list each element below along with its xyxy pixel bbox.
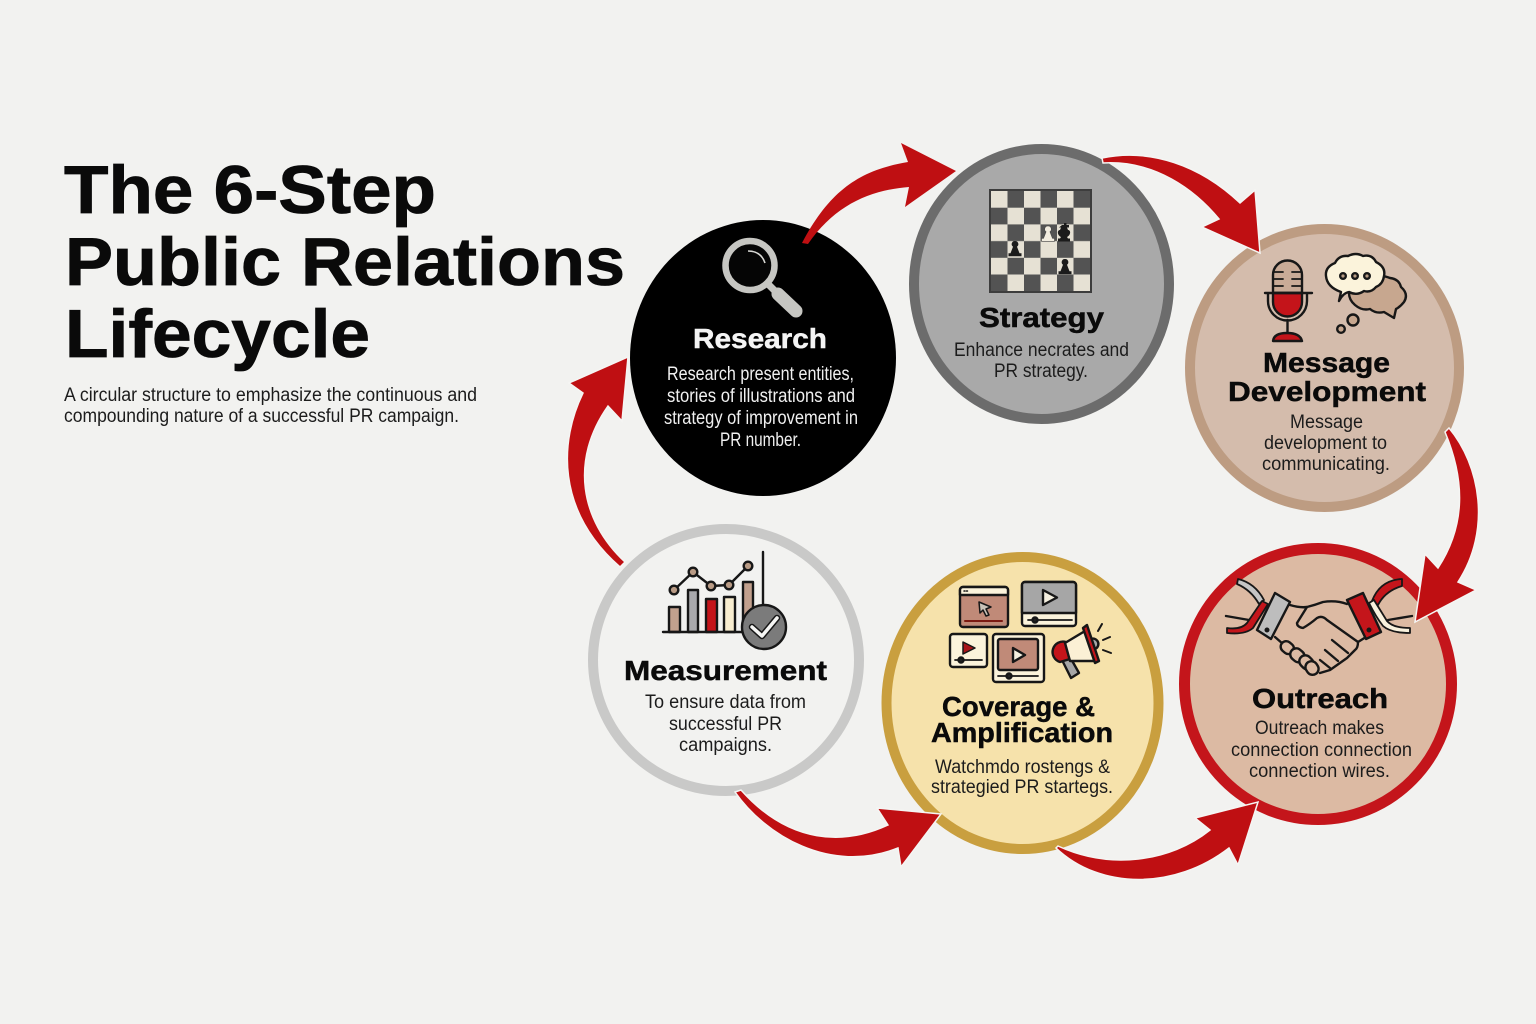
message body: Message xyxy=(1290,412,1363,433)
icon: magnifying glass xyxy=(726,241,796,311)
arrow: measurement to coverage xyxy=(735,790,941,867)
icon: handshake with wires xyxy=(1226,579,1412,677)
coverage heading xyxy=(931,691,1113,748)
measurement body xyxy=(645,692,806,756)
outreach body: Outreach makes xyxy=(1255,718,1384,739)
message body: development to xyxy=(1264,433,1387,454)
message body: communicating. xyxy=(1262,454,1390,475)
icon: speech bubbles xyxy=(1326,254,1406,333)
icon: media windows xyxy=(950,582,1076,682)
strategy circle xyxy=(914,149,1169,419)
research circle xyxy=(630,220,896,496)
coverage circle xyxy=(886,557,1158,849)
arrow: research to strategy xyxy=(802,143,956,244)
message heading: Development xyxy=(1228,376,1426,407)
message heading: Message xyxy=(1263,347,1390,378)
arrow: coverage to outreach xyxy=(1056,802,1258,880)
measurement heading: Measurement xyxy=(624,655,827,686)
title: Lifecycle xyxy=(65,296,370,372)
measurement body: successful PR xyxy=(669,714,782,735)
arrow: message development to outreach xyxy=(1415,428,1478,622)
subtitle: compounding nature of a successful PR campaign. xyxy=(64,406,459,427)
panel: coverage and amplification xyxy=(886,557,1158,849)
subtitle: A circular structure to emphasize the continuous and xyxy=(64,385,477,406)
icon: microphone xyxy=(1265,260,1312,341)
research body: PR number. xyxy=(720,430,801,451)
panel: outreach xyxy=(1184,548,1452,820)
strategy body: PR strategy. xyxy=(994,361,1088,382)
message body xyxy=(1262,412,1390,475)
panel: message development xyxy=(1190,229,1459,507)
outreach body: connection connection xyxy=(1231,740,1412,761)
outreach circle xyxy=(1184,548,1452,820)
strategy body xyxy=(954,340,1129,382)
icon: chess board xyxy=(990,190,1091,292)
message heading xyxy=(1228,347,1426,407)
measurement circle xyxy=(593,529,859,791)
research body: Research present entities, xyxy=(667,364,854,385)
coverage heading: Amplification xyxy=(931,717,1113,748)
arrow: measurement to research xyxy=(567,357,628,567)
research body xyxy=(664,364,858,451)
research body: stories of illustrations and xyxy=(667,386,855,407)
panel: measurement xyxy=(593,529,859,791)
outreach body xyxy=(1231,718,1412,782)
title: Public Relations xyxy=(65,224,625,300)
coverage body: Watchmdo rostengs & xyxy=(935,757,1110,778)
research body: strategy of improvement in xyxy=(664,408,858,429)
title: The 6-Step xyxy=(64,152,436,228)
panel: strategy xyxy=(914,149,1169,419)
coverage body xyxy=(931,757,1113,798)
title xyxy=(64,152,625,372)
message circle xyxy=(1190,229,1459,507)
icon: megaphone xyxy=(1053,624,1111,678)
subtitle xyxy=(64,385,477,427)
coverage heading: Coverage & xyxy=(942,691,1095,722)
arrow: strategy to message development xyxy=(1102,155,1260,253)
panel: research xyxy=(630,220,896,496)
research heading: Research xyxy=(693,323,827,354)
strategy body: Enhance necrates and xyxy=(954,340,1129,361)
outreach heading: Outreach xyxy=(1252,683,1388,714)
measurement body: campaigns. xyxy=(679,735,772,756)
coverage body: strategied PR startegs. xyxy=(931,777,1113,798)
icon: bar chart with check badge xyxy=(663,552,786,649)
strategy heading: Strategy xyxy=(979,302,1104,333)
measurement body: To ensure data from xyxy=(645,692,806,713)
outreach body: connection wires. xyxy=(1249,761,1390,782)
